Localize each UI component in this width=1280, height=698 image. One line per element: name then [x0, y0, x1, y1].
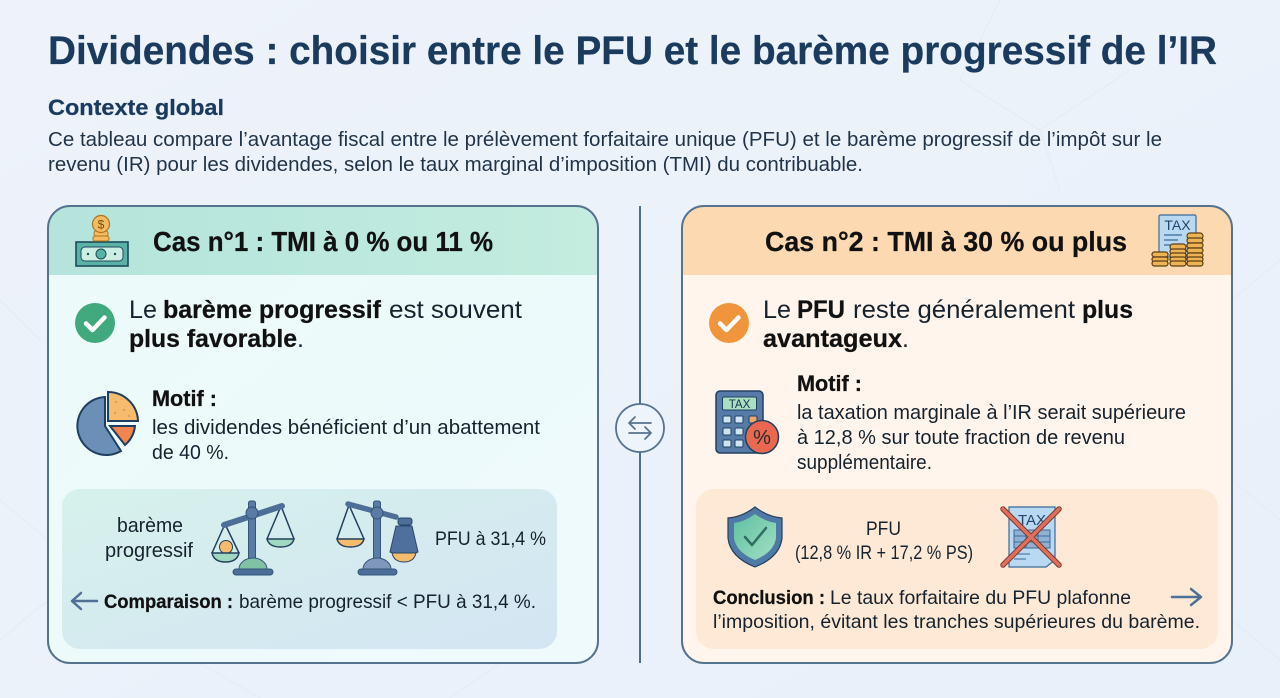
title: Dividendes : choisir entre le PFU et le barème progressif de l’IR: [48, 29, 1217, 73]
comparison text: barème progressif < PFU à 31,4 %.: [239, 591, 536, 613]
verdict 1: Le: [129, 296, 157, 324]
verdict 1: est souvent: [389, 296, 522, 324]
panel: cas 2: [682, 206, 1232, 663]
label: barème progressif: progressif: [105, 540, 193, 562]
icon: tax coins: [1152, 215, 1203, 266]
context text: revenu (IR) pour les dividendes, selon le taux marginal d’imposition (TMI) du contribuable.: [48, 153, 863, 176]
label: PFU à 31,4 %: PFU à 31,4 %: [435, 528, 546, 550]
icon: crossed tax form: TAX: [1018, 512, 1046, 529]
central divider: [616, 206, 664, 663]
verdict 2: [763, 296, 1133, 353]
verdict 1: plus favorable: [129, 325, 297, 353]
comparison text: [104, 591, 536, 613]
motif 2: la taxation marginale à l’IR serait supérieure: [797, 401, 1186, 424]
icon: scale tilted left: [212, 501, 294, 575]
label: barème progressif: [105, 515, 193, 562]
icon: calculator: %: [753, 427, 771, 449]
comparison box: [62, 489, 557, 649]
motif 1: les dividendes bénéficient d’un abattement: [152, 416, 540, 439]
motif 1: Motif :: [152, 386, 217, 411]
icon: green check: [75, 303, 115, 343]
icon: crossed tax form: [1003, 507, 1059, 567]
icon: shield: [728, 507, 782, 567]
motif 2: supplémentaire.: [797, 451, 932, 474]
PFU formula: (12,8 % IR + 17,2 % PS): [795, 542, 973, 564]
icon: calculator: [716, 391, 778, 454]
PFU formula: [795, 518, 973, 564]
conclusion text: l’imposition, évitant les tranches supérieures du barème.: [713, 611, 1200, 633]
verdict 2: PFU: [797, 296, 845, 324]
context heading: Contexte global: [48, 95, 224, 120]
icon: calculator: TAX: [729, 399, 751, 411]
motif 1: [152, 386, 540, 464]
conclusion box: [696, 489, 1218, 649]
verdict 1: [129, 296, 522, 353]
icon: tax coins: TAX: [1164, 217, 1191, 233]
comparison text: Comparaison :: [104, 591, 233, 613]
motif 2: à 12,8 % sur toute fraction de revenu: [797, 426, 1125, 449]
icon: money: [76, 216, 128, 266]
verdict 1: .: [297, 325, 304, 353]
verdict 2: avantageux: [763, 325, 902, 353]
conclusion text: Le taux forfaitaire du PFU plafonne: [830, 587, 1131, 609]
motif 2: [797, 371, 1186, 474]
verdict 2: reste généralement: [853, 296, 1075, 324]
verdict 2: Le: [763, 296, 791, 324]
panel: cas 1: [48, 206, 598, 663]
context text: [48, 128, 1162, 176]
icon: orange check: [709, 303, 749, 343]
panel 2 heading: Cas n°2 : TMI à 30 % ou plus: [765, 226, 1127, 257]
label: barème progressif: barème: [117, 515, 183, 537]
global context: [48, 95, 1162, 176]
PFU formula: PFU: [866, 518, 901, 540]
context text: Ce tableau compare l’avantage fiscal entre le prélèvement forfaitaire unique (PFU) et le barème progressif de l’impôt sur le: [48, 128, 1162, 151]
panel 1 heading: Cas n°1 : TMI à 0 % ou 11 %: [153, 226, 493, 257]
icon: money: $: [98, 218, 105, 232]
icon: pie chart: [77, 392, 138, 455]
motif 2: Motif :: [797, 371, 862, 396]
arrow right: [1172, 589, 1201, 605]
arrow left: [72, 593, 97, 609]
verdict 2: plus: [1082, 296, 1133, 324]
motif 1: de 40 %.: [152, 441, 229, 464]
verdict 1: barème progressif: [163, 296, 382, 324]
conclusion text: Conclusion :: [713, 587, 825, 609]
icon: scale tilted right: [337, 501, 418, 575]
verdict 2: .: [902, 325, 909, 353]
conclusion text: [713, 587, 1200, 633]
